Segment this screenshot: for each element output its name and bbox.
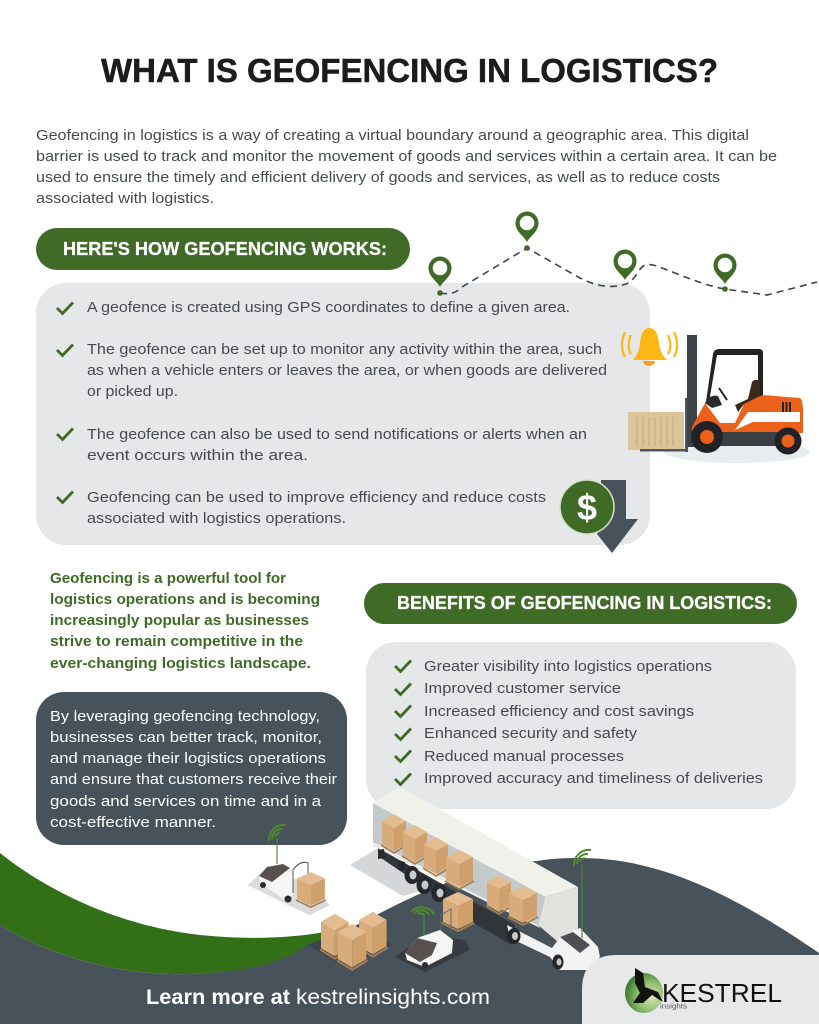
list item 3 — [57, 426, 587, 464]
heading pill: how geofencing works: HERE'S HOW GEOFENCING WORKS: — [63, 238, 387, 259]
icon: pin 1 — [428, 256, 452, 296]
panel: callout dark box: goods and services on time and in a — [50, 793, 322, 810]
panel: logo background — [582, 955, 819, 1024]
list item 4: associated with logistics operations. — [87, 510, 346, 527]
green callout text: logistics operations and is becoming — [50, 591, 320, 608]
delivery robot middle — [395, 892, 474, 972]
benefit 5: Reduced manual processes — [424, 748, 624, 765]
green callout text — [50, 570, 320, 672]
illustration: truck and delivery robots — [248, 787, 600, 972]
green callout text: increasingly popular as businesses — [50, 612, 309, 629]
panel: callout dark box: and manage their logistics operations — [50, 750, 326, 767]
icon: pin 2 — [516, 212, 538, 251]
icon: alarm bell — [622, 328, 677, 366]
list item 1: A geofence is created using GPS coordinates to define a given area. — [87, 299, 570, 316]
wave: green — [0, 853, 325, 974]
title: WHAT IS GEOFENCING IN LOGISTICS? — [101, 53, 718, 90]
list item 2 — [57, 341, 607, 400]
panel: callout dark box: and ensure that customers receive their — [50, 771, 337, 788]
panel: how geofencing works — [36, 283, 650, 545]
footer call to action: Learn more at — [146, 986, 290, 1009]
icon: cost reduction dollar and arrow: $ — [577, 487, 597, 528]
icon: cost reduction dollar and arrow — [560, 480, 638, 553]
antenna: truck — [574, 850, 591, 938]
benefit 4: Enhanced security and safety — [424, 725, 638, 742]
logo: Kestrel Insights: insights — [660, 1004, 688, 1010]
intro paragraph: barrier is used to track and monitor the movement of goods and services within a certain area. It can be — [36, 148, 777, 165]
icon: pin 3 — [614, 250, 636, 280]
truck cab — [507, 925, 600, 970]
logo: Kestrel Insights — [625, 968, 782, 1013]
list item 4: Geofencing can be used to improve efficiency and reduce costs — [87, 489, 546, 506]
green callout text: Geofencing is a powerful tool for — [50, 570, 286, 587]
panel: callout dark box: cost-effective manner. — [50, 814, 216, 831]
icon: kestrel bird over green circle — [625, 968, 663, 1013]
footer call to action — [146, 986, 490, 1009]
list item 2: The geofence can be set up to monitor any activity within the area, such — [87, 341, 602, 358]
heading pill: how geofencing works — [36, 228, 410, 270]
intro paragraph: associated with logistics. — [36, 190, 214, 207]
footer call to action: kestrelinsights.com — [296, 986, 490, 1009]
intro paragraph: used to ensure the timely and efficient delivery of goods and services, as well as to reduce costs — [36, 169, 720, 186]
benefit 1: Greater visibility into logistics operations — [424, 658, 712, 675]
benefit 6: Improved accuracy and timeliness of deliveries — [424, 770, 763, 787]
delivery robot left — [248, 825, 330, 915]
pallet of boxes — [308, 912, 392, 971]
benefit 3: Increased efficiency and cost savings — [424, 703, 694, 720]
trailer cargo — [381, 814, 538, 926]
panel: callout dark box: businesses can better track, monitor, — [50, 729, 322, 746]
trailer — [373, 787, 578, 945]
list item 3: The geofence can also be used to send notifications or alerts when an — [87, 426, 587, 443]
heading pill: benefits — [364, 583, 797, 624]
wave: dark footer background — [0, 858, 819, 1024]
panel: callout dark box — [36, 692, 347, 845]
list item 2: or picked up. — [87, 383, 178, 400]
heading pill: benefits: BENEFITS OF GEOFENCING IN LOGISTICS: — [397, 592, 772, 613]
intro paragraph — [36, 127, 777, 207]
benefit 2: Improved customer service — [424, 680, 621, 697]
green callout text: ever-changing logistics landscape. — [50, 655, 311, 672]
panel: callout dark box: By leveraging geofencing technology, — [50, 708, 320, 725]
icon: pin 4 — [714, 254, 736, 292]
logo: Kestrel Insights: KESTREL — [662, 978, 782, 1008]
list item 3: event occurs within the area. — [87, 447, 308, 464]
green callout text: strive to remain competitive in the — [50, 633, 303, 650]
list item 2: as when a vehicle enters or leaves the area, or when goods are delivered — [87, 362, 607, 379]
list item 4 — [57, 489, 546, 527]
intro paragraph: Geofencing in logistics is a way of creating a virtual boundary around a geographic area. This digital — [36, 127, 749, 144]
panel: benefits list — [366, 642, 796, 809]
illustration: forklift with crate — [628, 335, 810, 463]
dashed route line with location pins — [428, 212, 817, 296]
